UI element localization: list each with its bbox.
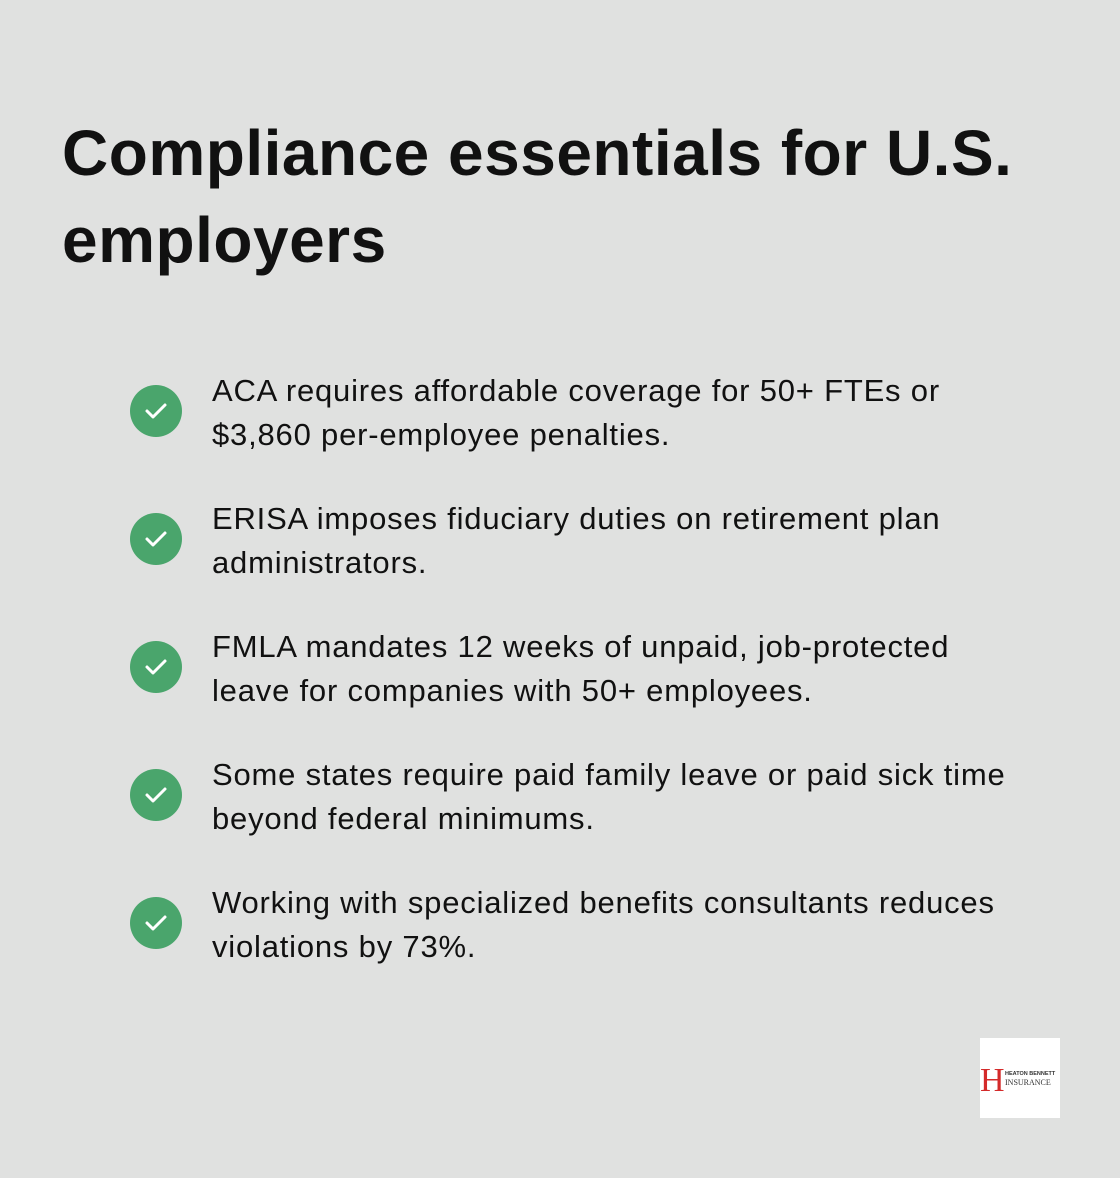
item: FMLA	[130, 629, 949, 708]
text	[212, 757, 1006, 836]
title: employers	[62, 204, 387, 276]
logo: H	[980, 1062, 1005, 1099]
text	[212, 885, 995, 964]
logo	[980, 1038, 1060, 1118]
text	[212, 501, 940, 580]
item: ACA	[130, 373, 940, 452]
text: FMLA mandates 12 weeks of unpaid, job-protected	[212, 629, 949, 664]
text: Some states require paid family leave or paid sick time	[212, 757, 1006, 792]
text: Working with specialized benefits consultants reduces	[212, 885, 995, 920]
text: ACA requires affordable coverage for 50+ FTEs or	[212, 373, 940, 408]
text: $3,860 per-employee penalties.	[212, 417, 670, 452]
item: ERISA	[130, 501, 940, 580]
text	[212, 629, 949, 708]
icon: check	[130, 897, 182, 949]
text: administrators.	[212, 545, 427, 580]
title	[62, 117, 1012, 276]
logo: INSURANCE	[1005, 1078, 1051, 1087]
icon: check	[130, 513, 182, 565]
text: ERISA imposes fiduciary duties on retirement plan	[212, 501, 940, 536]
text: leave for companies with 50+ employees.	[212, 673, 813, 708]
icon: check	[130, 641, 182, 693]
icon: check	[130, 769, 182, 821]
icon: check	[130, 385, 182, 437]
text	[212, 373, 940, 452]
text: violations by 73%.	[212, 929, 476, 964]
title: Compliance essentials for U.S.	[62, 117, 1012, 189]
item: consultants	[130, 885, 995, 964]
logo: HEATON BENNETT	[1005, 1071, 1056, 1077]
text: beyond federal minimums.	[212, 801, 595, 836]
item: states	[130, 757, 1006, 836]
